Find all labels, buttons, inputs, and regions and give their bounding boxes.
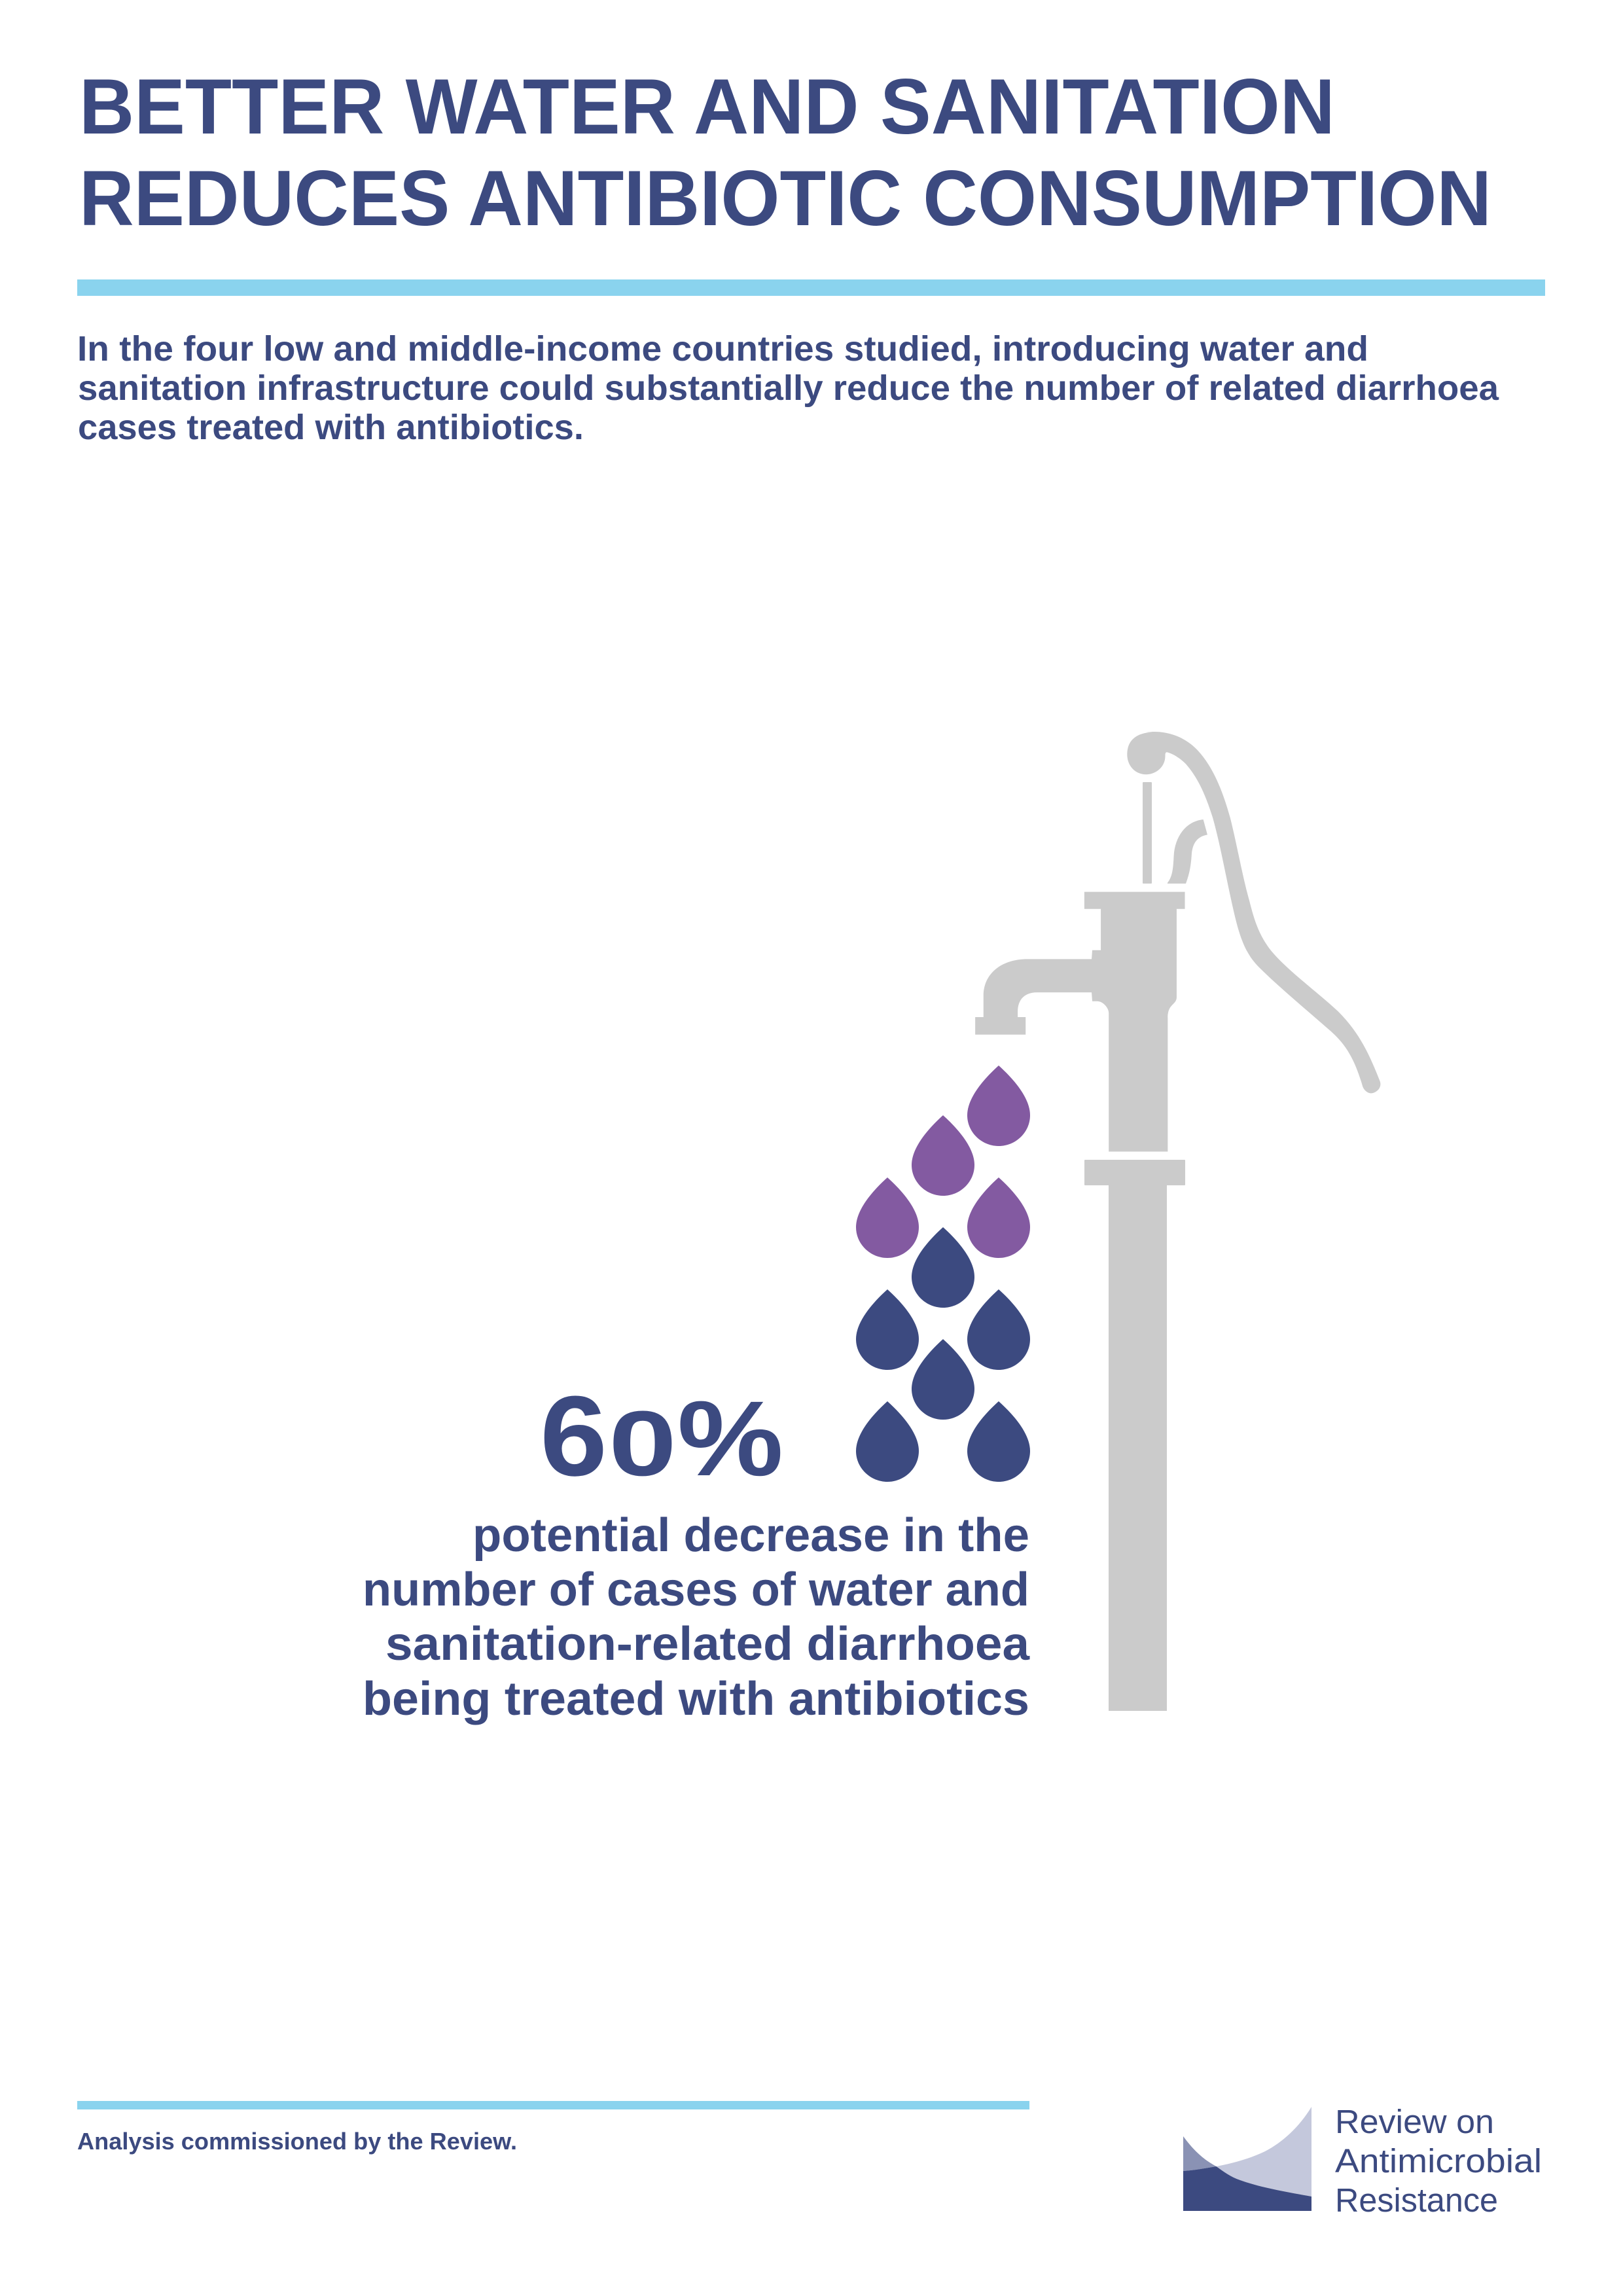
intro text: In the four low and middle-income countries studied, introducing water and [77, 329, 1368, 368]
big number: 60%: 6 [540, 1372, 607, 1499]
title: REDUCES ANTIBIOTIC CONSUMPTION [79, 154, 1491, 242]
intro text: cases treated with antibiotics. [78, 408, 584, 447]
pump rod [1143, 782, 1152, 884]
pump body and spout [975, 892, 1185, 1152]
top rule [77, 279, 1545, 296]
pump lower flange [1084, 1160, 1185, 1185]
logo wordmark: Resistance [1335, 2181, 1498, 2219]
title [79, 63, 1491, 242]
water drops: purple [856, 1066, 1030, 1258]
callout text: potential decrease in the [473, 1509, 1029, 1562]
big number: 60%: % [677, 1378, 783, 1498]
icon: water pump [975, 732, 1380, 1711]
callout text: number of cases of water and [363, 1564, 1029, 1616]
intro text [77, 329, 1499, 447]
callout text [363, 1509, 1030, 1725]
pump lower column [1109, 1181, 1167, 1711]
callout text: being treated with antibiotics [363, 1673, 1029, 1725]
logo mark [1183, 2107, 1311, 2211]
pump handle [1127, 732, 1380, 1093]
big number: 60%: 0 [609, 1391, 677, 1495]
logo: Review on Antimicrobial Resistance [1183, 2103, 1542, 2219]
pump small curved lever [1168, 819, 1207, 884]
logo wordmark [1335, 2103, 1542, 2219]
callout text: sanitation-related diarrhoea [385, 1618, 1030, 1670]
footer rule [77, 2101, 1029, 2109]
intro text: sanitation infrastructure could substantially reduce the number of related diarrhoea [78, 368, 1499, 408]
title: BETTER WATER AND SANITATION [79, 63, 1335, 151]
footer source note: Analysis commissioned by the Review. [77, 2128, 517, 2155]
logo wordmark: Antimicrobial [1335, 2142, 1542, 2179]
logo wordmark: Review on [1335, 2103, 1494, 2140]
water drops: navy [856, 1227, 1030, 1482]
